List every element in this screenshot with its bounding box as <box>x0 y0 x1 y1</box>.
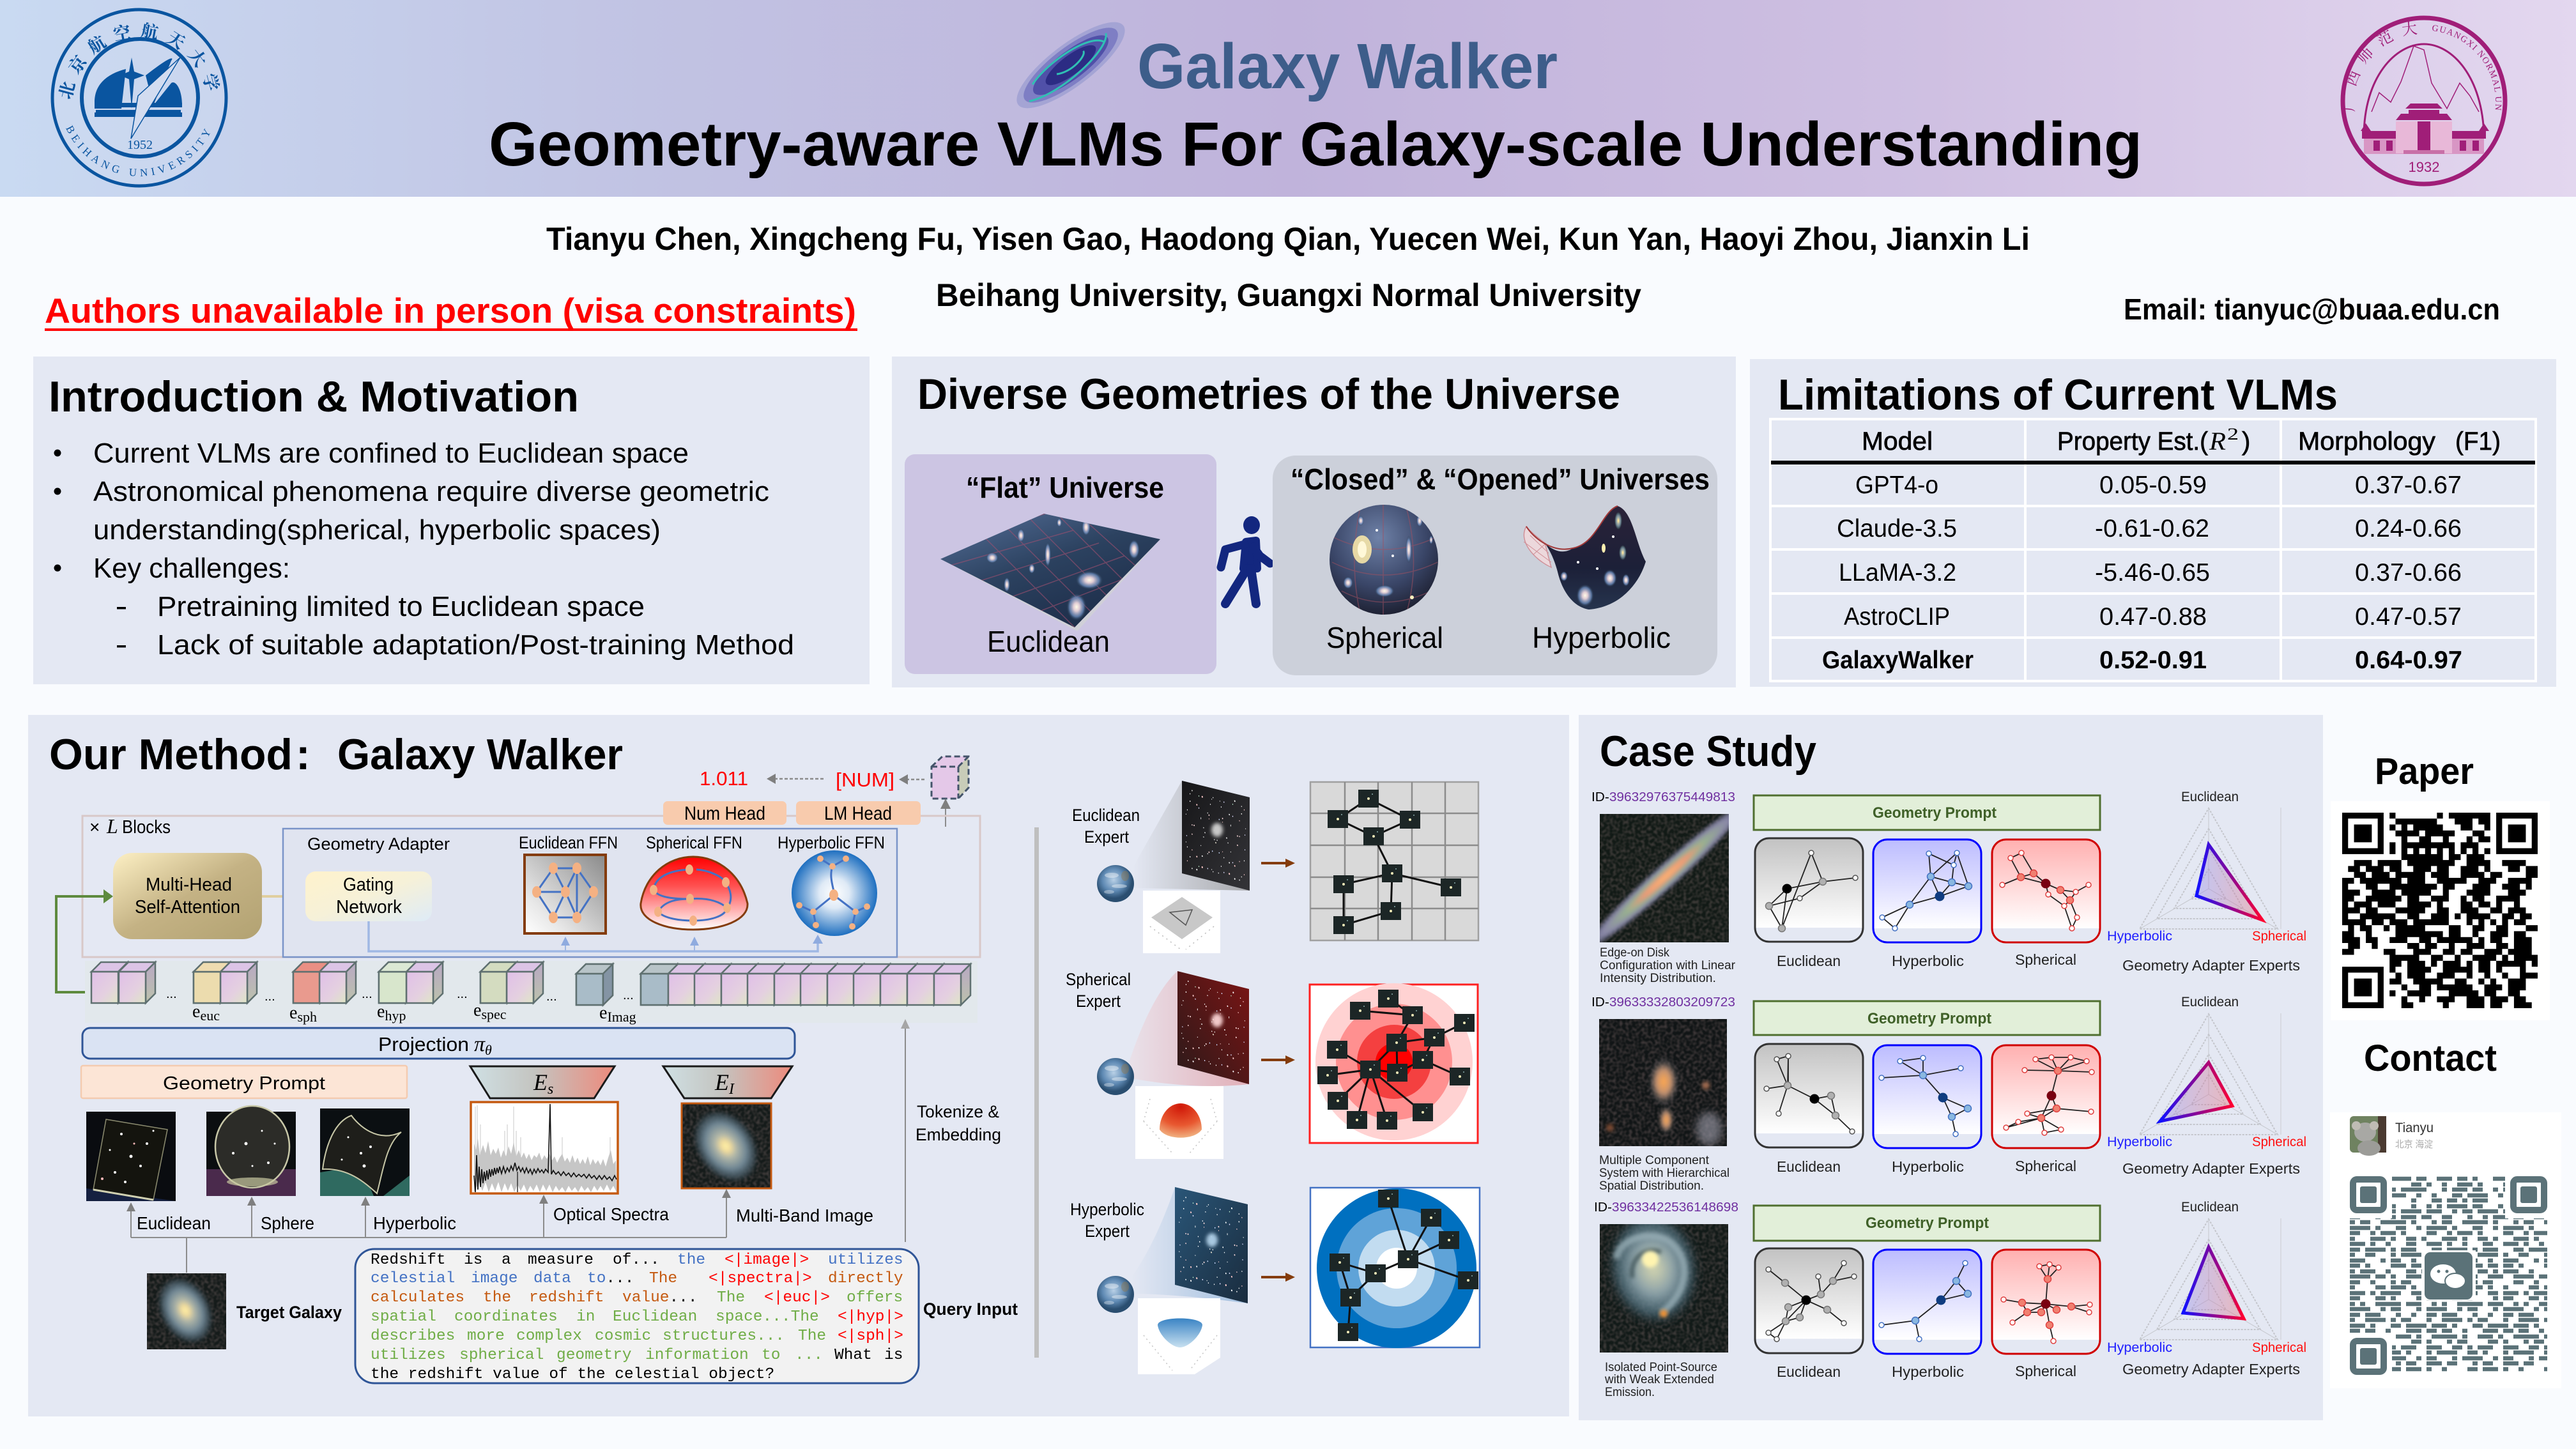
bullet list: Astronomical phenomena require diverse geometric <box>93 476 769 507</box>
arrow: tokens to attention <box>56 889 113 992</box>
image: multiple component galaxy <box>1599 1019 1727 1146</box>
token embedding strip: ... <box>457 987 468 1001</box>
heading: contact: Contact <box>2364 1038 2497 1079</box>
icon: galaxy spiral <box>1006 9 1136 121</box>
token embedding strip: e <box>377 1002 385 1022</box>
query text box: value <box>622 1289 670 1307</box>
case 3: ID-39633422536148698 <box>1594 1200 1738 1215</box>
hyperbolic expert: Expert <box>1085 1222 1130 1241</box>
query text box: spherical <box>459 1347 544 1364</box>
query text box: Euclidean <box>613 1308 697 1326</box>
query text box: <|image|> <box>724 1252 809 1269</box>
panel: case study <box>1579 715 2323 1420</box>
spherical FFN <box>641 833 747 930</box>
query text box: ... <box>606 1270 634 1287</box>
query text box: calculates <box>371 1289 464 1307</box>
query text box: cosmic <box>595 1328 651 1345</box>
query text box: space...The <box>716 1308 819 1326</box>
query text box: of... <box>613 1252 660 1269</box>
query text box: more <box>467 1328 505 1345</box>
gating connector <box>369 921 823 951</box>
radar chart <box>2107 1200 2306 1377</box>
image: sphere <box>1330 505 1438 617</box>
hyperbolic graph card <box>1873 839 1981 969</box>
euclidean FFN: Euclidean FFN <box>519 833 618 852</box>
authors: Tianyu Chen, Xingcheng Fu, Yisen Gao, Haodong Qian, Yuecen Wei, Kun Yan, Haoyi Zhou, Jianxin Li <box>546 221 2030 257</box>
hyperbolic graph <box>1310 1188 1480 1348</box>
query text box: utilizes <box>828 1252 903 1269</box>
query text box: coordinates <box>454 1308 558 1326</box>
title: Geometry-aware VLMs For Galaxy-scale Understanding <box>489 109 2142 179</box>
query text box: The <box>717 1289 745 1307</box>
hyperbolic graph card: Hyperbolic <box>1892 953 1964 969</box>
spherical graph card: Spherical <box>2015 951 2076 968</box>
heading: introduction: Introduction & Motivation <box>49 372 579 421</box>
arrow: tokenize and embedding: Embedding <box>916 1125 1001 1144</box>
query text box: the <box>483 1289 511 1307</box>
query text box: geometry <box>556 1347 632 1364</box>
results table: LLaMA-3.2 <box>1839 559 1956 586</box>
icon: walking person <box>1221 516 1270 604</box>
token embedding strip: e <box>473 1000 481 1020</box>
query text box: What <box>834 1347 872 1364</box>
arrow: to output token <box>940 799 951 827</box>
encoder EI <box>663 1066 792 1098</box>
projection bar: θ <box>485 1042 492 1058</box>
email: Email: tianyuc@buaa.edu.cn <box>2124 293 2500 326</box>
logo: Beihang University <box>52 10 226 186</box>
spherical graph card: Spherical <box>2015 1363 2076 1379</box>
multi-head self-attention: Multi-Head <box>146 875 232 895</box>
euclidean expert: Expert <box>1084 827 1129 847</box>
closed and opened universes card: Hyperbolic <box>1532 621 1671 654</box>
case 3 <box>1594 1200 2306 1399</box>
results table: 0.37-0.66 <box>2355 559 2462 586</box>
projection bar <box>82 1028 795 1059</box>
chart: optical spectra <box>471 1102 618 1193</box>
image: multi-band galaxy <box>679 1097 772 1195</box>
results table: Morphology <box>2298 427 2435 456</box>
QR code: contact: 北京 海淀 <box>2395 1139 2433 1150</box>
query text box: ... <box>670 1289 698 1307</box>
arrow: attention to gating <box>262 889 305 903</box>
case 2: Spatial Distribution. <box>1599 1179 1704 1193</box>
euclidean graph card <box>1755 1248 1863 1380</box>
token embedding strip: ... <box>264 990 275 1004</box>
token embedding strip: Imag <box>607 1009 636 1025</box>
euclidean graph <box>1310 782 1478 940</box>
bullet list: Current VLMs are confined to Euclidean space <box>93 438 689 469</box>
logo: Guangxi Normal University <box>0 0 2505 184</box>
hyperbolic expert: Hyperbolic <box>1070 1200 1144 1219</box>
spherical graph card <box>1992 839 2100 968</box>
query text box: directly <box>828 1270 903 1287</box>
query text box: structures... <box>663 1328 785 1345</box>
token embedding strip: ... <box>166 987 177 1001</box>
spherical graph card <box>1992 1045 2100 1174</box>
geometry prompt: Geometry Prompt <box>1867 1010 1991 1027</box>
query text box <box>355 1249 919 1383</box>
panel: introduction and motivation <box>33 356 870 684</box>
radar chart: Geometry Adapter Experts <box>2122 1361 2300 1377</box>
hyperbolic graph card <box>1873 1250 1981 1380</box>
QR code: contact: Tianyu <box>2395 1121 2434 1135</box>
logo: Beihang University: 北京航空航天大学 <box>58 22 220 99</box>
spherical expert <box>1066 970 1295 1159</box>
arrow: tokenize and embedding: Tokenize & <box>917 1102 999 1121</box>
query text box: to <box>587 1270 606 1287</box>
closed and opened universes card <box>1273 456 1717 675</box>
notice: authors unavailable: Authors unavailable in person (visa constraints) <box>45 291 856 330</box>
query text box: <|spectra|> <box>709 1270 812 1287</box>
euclidean expert: Euclidean <box>1072 806 1140 825</box>
output values: [NUM] <box>836 769 894 791</box>
query text box: redshift <box>529 1289 604 1307</box>
spherical graph <box>1310 983 1478 1143</box>
query text box: <|hyp|> <box>838 1308 903 1326</box>
bullet list: Lack of suitable adaptation/Post-training Method <box>157 629 794 661</box>
query input label: Query Input <box>923 1300 1018 1319</box>
token embedding strip <box>85 961 977 1025</box>
multi-head self-attention <box>113 853 262 939</box>
gating network: Gating <box>343 875 394 895</box>
euclidean graph card <box>1755 838 1863 969</box>
target galaxy label: Target Galaxy <box>236 1303 342 1322</box>
token embedding strip: ... <box>546 990 557 1004</box>
token embedding strip: ... <box>362 987 372 1001</box>
results table: -5.46-0.65 <box>2095 559 2210 586</box>
avatar: koala <box>2350 1116 2386 1156</box>
projection bar: π <box>474 1032 485 1056</box>
hyperbolic graph card: Hyperbolic <box>1892 1363 1964 1380</box>
hyperbolic FFN: Hyperbolic FFN <box>778 833 885 852</box>
results table: 0.52-0.91 <box>2099 647 2207 674</box>
query text box: the <box>677 1252 705 1269</box>
radar chart <box>2107 790 2306 974</box>
heading: our method: : <box>296 730 310 779</box>
output values: 1.011 <box>700 767 748 790</box>
image: glass saddle <box>320 1108 410 1196</box>
token embedding strip: euc <box>200 1008 220 1023</box>
token embedding strip: e <box>289 1003 297 1023</box>
radar chart: Hyperbolic <box>2107 1135 2172 1149</box>
case 2: ID-39633332803209723 <box>1591 995 1735 1009</box>
flat universe card: Euclidean <box>987 625 1110 658</box>
image: glass sphere <box>206 1106 296 1196</box>
case 3: Emission. <box>1605 1386 1655 1399</box>
spherical graph card: Spherical <box>2015 1158 2076 1174</box>
radar chart: Hyperbolic <box>2107 929 2172 944</box>
euclidean graph card: Euclidean <box>1777 1158 1841 1175</box>
radar chart: Geometry Adapter Experts <box>2122 1160 2300 1177</box>
encoder EI: I <box>728 1081 735 1098</box>
input labels: Euclidean <box>137 1213 211 1233</box>
heading: paper: Paper <box>2375 751 2474 792</box>
query text box: is <box>464 1252 482 1269</box>
query text box: celestial <box>371 1270 455 1287</box>
heading: diverse geometries: Diverse Geometries of the Universe <box>917 370 1620 418</box>
query text box: offers <box>847 1289 903 1307</box>
geometry prompt box <box>81 1066 407 1098</box>
radar chart: Euclidean <box>2181 790 2239 804</box>
encoder EI: E <box>715 1070 729 1095</box>
case 2: Multiple Component <box>1599 1154 1710 1167</box>
image: flat plane <box>940 514 1160 631</box>
hyperbolic expert <box>1070 1187 1295 1374</box>
radar chart: Euclidean <box>2181 1200 2239 1215</box>
image: saddle <box>1524 506 1646 610</box>
results table: 0.47-0.88 <box>2099 603 2207 631</box>
euclidean graph card: Euclidean <box>1777 1363 1841 1380</box>
results table: Property Est.( <box>2057 427 2209 456</box>
euclidean expert <box>1072 781 1295 953</box>
query text box: measure <box>528 1252 594 1269</box>
query text box: information <box>645 1347 749 1364</box>
lm head: LM Head <box>824 803 892 824</box>
input labels: Hyperbolic <box>373 1213 456 1233</box>
case 1: Edge-on Disk <box>1600 946 1669 960</box>
bullet list <box>54 438 794 661</box>
case 1: Configuration with Linear <box>1600 959 1736 972</box>
header banner <box>0 0 2576 197</box>
panel: limitations of current VLMs <box>1750 359 2556 687</box>
query text box: in <box>576 1308 595 1326</box>
results table: GalaxyWalker <box>1822 647 1974 674</box>
case 2: System with Hierarchical <box>1599 1167 1729 1180</box>
encoder Es <box>470 1066 615 1098</box>
heading: case study: Case Study <box>1600 727 1816 776</box>
results table: 0.47-0.57 <box>2355 603 2462 631</box>
logo title: Galaxy Walker <box>1137 31 1558 102</box>
results table: Claude-3.5 <box>1837 515 1957 542</box>
spherical expert: Expert <box>1076 992 1121 1011</box>
euclidean graph card: Euclidean <box>1777 953 1841 969</box>
input labels <box>137 1204 873 1233</box>
logo: Beihang University: 1952 <box>127 138 153 152</box>
query text box: the redshift value of the celestial object? <box>371 1366 774 1383</box>
case 2 <box>1591 995 2306 1193</box>
bullet list: Pretraining limited to Euclidean space <box>157 591 645 622</box>
QR code: contact <box>2330 1112 2561 1388</box>
results table: 0.64-0.97 <box>2355 647 2462 674</box>
geometry prompt: Geometry Prompt <box>1873 804 1997 822</box>
radar chart: Geometry Adapter Experts <box>2122 957 2300 974</box>
token embedding strip: sph <box>297 1009 317 1025</box>
geometry adapter box <box>283 829 897 957</box>
results table: 0.37-0.67 <box>2355 471 2462 499</box>
euclidean FFN <box>519 833 618 933</box>
hyperbolic graph card <box>1873 1045 1981 1175</box>
query text box: The <box>649 1270 677 1287</box>
heading: our method: Our Method <box>49 730 293 779</box>
lm head <box>796 801 921 825</box>
projection bar: Projection <box>378 1033 469 1055</box>
output values <box>700 767 924 791</box>
L blocks label <box>89 815 171 838</box>
image: spiral galaxy <box>1598 1204 1728 1353</box>
radar chart <box>2107 995 2306 1177</box>
spherical FFN: Spherical FFN <box>646 833 742 852</box>
results table <box>1770 419 2536 681</box>
closed and opened universes card: Spherical <box>1326 621 1443 654</box>
query text box: complex <box>516 1328 582 1345</box>
flat universe card: “Flat” Universe <box>966 471 1164 504</box>
geometry prompt <box>1754 795 2100 830</box>
case 3: Isolated Point-Source <box>1605 1361 1717 1374</box>
panel: diverse geometries <box>892 356 1736 687</box>
input labels: Multi-Band Image <box>736 1206 873 1225</box>
num head <box>663 801 786 825</box>
radar chart: Spherical <box>2252 1135 2306 1149</box>
arrows: target galaxy to inputs <box>126 1189 731 1273</box>
query text box: <|euc|> <box>764 1289 830 1307</box>
results table: 0.24-0.66 <box>2355 515 2462 542</box>
geometry prompt <box>1754 1001 2100 1035</box>
query text box: to <box>762 1347 780 1364</box>
icon: dashed output token cube <box>931 756 969 799</box>
token embedding strip: ... <box>623 988 634 1002</box>
token embedding strip: e <box>599 1003 607 1023</box>
geometry prompt box: Geometry Prompt <box>163 1073 325 1094</box>
hyperbolic FFN <box>778 833 885 936</box>
heading: our method: Galaxy Walker <box>337 730 623 779</box>
gating network <box>305 871 432 921</box>
radar chart: Hyperbolic <box>2107 1340 2172 1355</box>
num head: Num Head <box>684 803 765 824</box>
results table: Model <box>1862 427 1933 456</box>
query text box: utilizes <box>371 1347 446 1364</box>
L blocks label: L <box>106 815 118 838</box>
spherical graph card <box>1992 1250 2100 1379</box>
transformer blocks frame <box>56 801 980 992</box>
token embedding strip: e <box>192 1002 200 1022</box>
case 3: with Weak Extended <box>1604 1373 1714 1386</box>
heading: limitations: Limitations of Current VLMs <box>1778 371 2338 419</box>
input labels: Sphere <box>261 1213 314 1233</box>
QR code: paper <box>2331 801 2550 1020</box>
euclidean graph card <box>1755 1044 1863 1175</box>
affiliations: Beihang University, Guangxi Normal University <box>936 277 1641 313</box>
results table: 0.05-0.59 <box>2099 471 2207 499</box>
radar chart: Spherical <box>2252 1340 2306 1355</box>
query text box: <|sph|> <box>838 1328 903 1345</box>
case 1 <box>1579 790 2306 985</box>
hyperbolic graph card: Hyperbolic <box>1892 1158 1964 1175</box>
case 1: ID-39632976375449813 <box>1591 790 1735 804</box>
radar chart: Spherical <box>2252 929 2306 944</box>
gating network: Network <box>336 897 402 917</box>
results table: GPT4-o <box>1855 471 1938 499</box>
query text box: a <box>502 1252 511 1269</box>
encoder Es: s <box>548 1081 553 1098</box>
panel: our method <box>28 715 1569 1416</box>
query text box: data <box>533 1270 571 1287</box>
case 1: Intensity Distribution. <box>1600 972 1716 985</box>
input labels: Optical Spectra <box>553 1204 669 1224</box>
L blocks label: × <box>89 817 100 837</box>
query text box: describes <box>371 1328 455 1345</box>
encoder Es: E <box>533 1070 548 1095</box>
query text box: is <box>884 1347 903 1364</box>
logo: Guangxi Normal University: 1932 <box>2409 159 2439 175</box>
token embedding strip: hyp <box>385 1008 406 1023</box>
flat universe card <box>905 454 1216 674</box>
bullet list: Key challenges: <box>93 553 290 584</box>
image: target galaxy <box>146 1267 226 1354</box>
results table: AstroCLIP <box>1844 603 1950 631</box>
query text box: The <box>798 1328 826 1345</box>
logo: Beihang University: BEIHANG UNIVERSITY <box>66 125 210 176</box>
geometry prompt <box>1754 1206 2100 1241</box>
image: euclidean glass slab <box>86 1112 176 1201</box>
radar chart: Euclidean <box>2181 995 2239 1009</box>
results table: (F1) <box>2455 427 2501 456</box>
query text box: spatial <box>371 1308 436 1326</box>
multi-head self-attention: Self-Attention <box>135 897 240 917</box>
query text box: image <box>471 1270 518 1287</box>
results table: R <box>2209 427 2226 456</box>
L blocks label: Blocks <box>122 817 171 838</box>
spherical expert: Spherical <box>1066 970 1131 989</box>
bullet list: understanding(spherical, hyperbolic spaces) <box>93 514 661 546</box>
closed and opened universes card: “Closed” & “Opened” Universes <box>1291 463 1710 496</box>
results table: -0.61-0.62 <box>2095 515 2209 542</box>
arrow: tokenize and embedding <box>901 1019 1001 1242</box>
query text box: ... <box>795 1347 823 1364</box>
token embedding strip: spec <box>481 1006 507 1022</box>
results table: ) <box>2242 427 2250 456</box>
geometry prompt: Geometry Prompt <box>1866 1215 1989 1232</box>
results table: 2 <box>2227 425 2239 443</box>
query text box: Redshift <box>371 1252 446 1269</box>
geometry adapter box: Geometry Adapter <box>307 834 450 854</box>
image: edge-on galaxy <box>1579 797 1752 956</box>
